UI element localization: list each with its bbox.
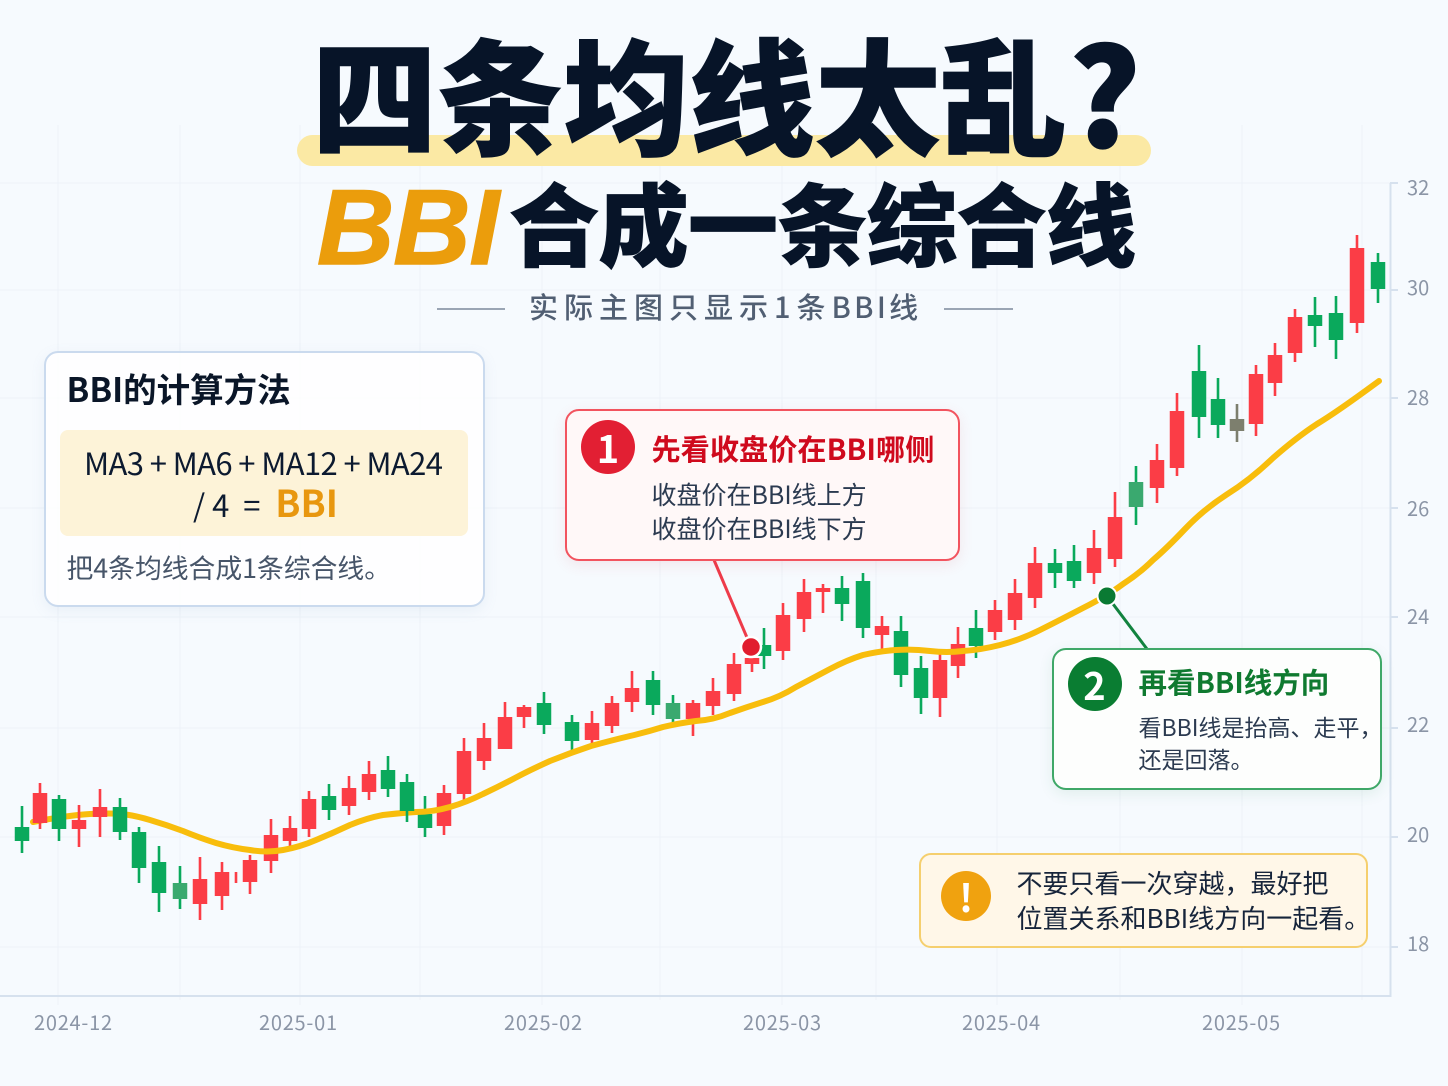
formula line 1: MA3 + MA6 + MA12 + MA24	[84, 439, 442, 484]
callout 2 text: 还是回落。	[1138, 740, 1254, 774]
title line 2	[317, 155, 1136, 287]
callout 1	[564, 408, 960, 560]
warning text	[1016, 864, 1370, 936]
icon: warning: !	[959, 868, 973, 923]
x axis labels: 2025-01	[259, 1007, 338, 1036]
y axis labels: 30	[1407, 272, 1429, 301]
callout 2 text	[1138, 708, 1382, 774]
y axis labels: 26	[1407, 493, 1429, 522]
icon: warning	[941, 871, 991, 921]
panel: BBI formula	[44, 350, 484, 606]
callout 2 heading: 再看BBI线方向	[1138, 660, 1329, 702]
title highlight	[297, 135, 1151, 166]
y axis labels: 32	[1407, 172, 1429, 201]
badge 1	[581, 420, 635, 474]
leader: red	[714, 560, 761, 657]
axes	[0, 183, 1398, 996]
badge 2: 2	[1083, 656, 1106, 711]
panel heading: BBI的计算方法	[66, 362, 291, 412]
subtitle: 实际主图只显示1条BBI线	[529, 285, 924, 327]
y axis labels: 24	[1407, 601, 1429, 630]
y axis labels: 20	[1407, 819, 1429, 848]
title line 2 text: 合成一条综合线	[509, 155, 1136, 285]
candlesticks behind line	[22, 235, 1378, 920]
callout 1 heading: 先看收盘价在BBI哪侧	[652, 426, 934, 468]
BBI accent: BBI	[317, 167, 498, 287]
y axis labels: 18	[1407, 928, 1429, 957]
candlesticks in front of line	[40, 774, 407, 847]
warning box	[918, 852, 1368, 948]
x axis labels: 2025-03	[743, 1007, 822, 1036]
formula line 2: / 4 = BBI	[193, 474, 338, 528]
callout 2 text: 看BBI线是抬高、走平，	[1138, 708, 1382, 742]
BBI line	[33, 381, 1379, 852]
y axis labels: 22	[1407, 709, 1429, 738]
y axis labels: 28	[1407, 382, 1429, 411]
formula box	[60, 430, 468, 536]
x axis labels: 2025-05	[1202, 1007, 1281, 1036]
callout 1 text: 收盘价在BBI线上方	[652, 476, 867, 512]
badge 2	[1068, 657, 1122, 711]
callout 1 text: 收盘价在BBI线下方	[652, 510, 867, 546]
warning text: 位置关系和BBI线方向一起看。	[1016, 898, 1370, 936]
x axis labels	[34, 1007, 1281, 1036]
leader: green	[1098, 586, 1147, 649]
callout 2	[1052, 648, 1382, 790]
panel caption: 把4条均线合成1条综合线。	[66, 547, 391, 586]
badge 1: 1	[597, 419, 619, 474]
x axis labels: 2024-12	[34, 1007, 113, 1036]
x axis labels: 2025-02	[504, 1007, 583, 1036]
callout 1 text	[652, 476, 867, 546]
y axis labels	[1407, 172, 1429, 957]
x axis labels: 2025-04	[962, 1007, 1041, 1036]
warning text: 不要只看一次穿越，最好把	[1016, 864, 1329, 900]
